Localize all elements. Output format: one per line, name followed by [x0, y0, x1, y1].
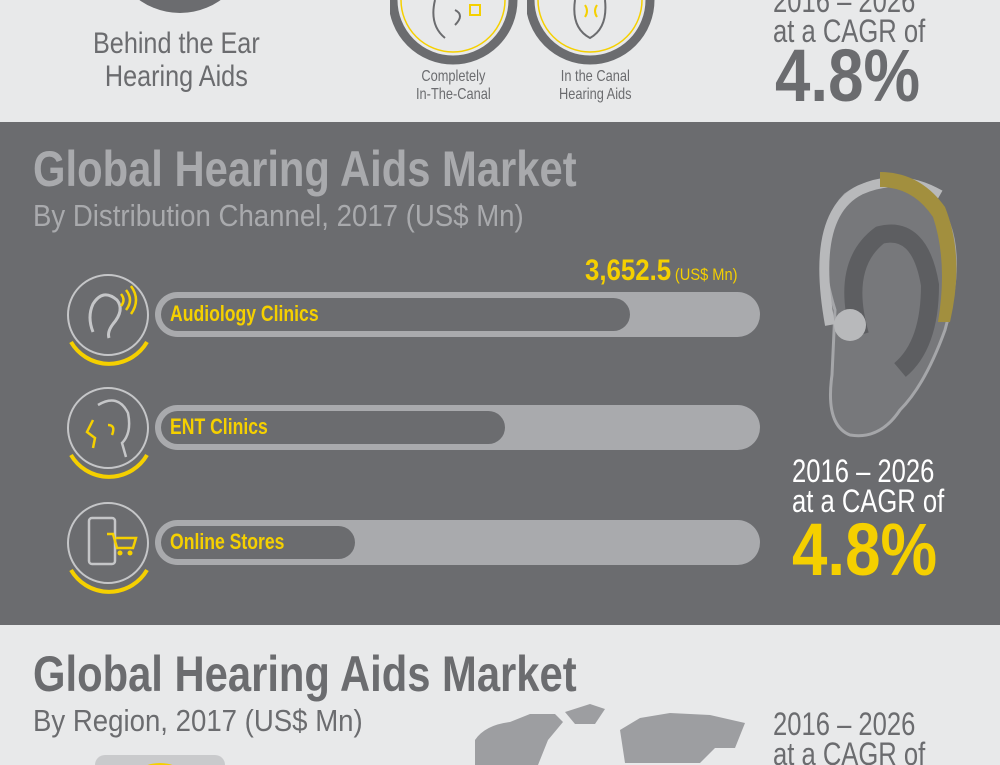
icon: region badge	[95, 755, 225, 765]
callout: CAGR bottom	[773, 706, 926, 765]
text: Completely In-The-Canal: Completely	[421, 68, 485, 85]
text: Behind the Ear Hearing Aids	[93, 27, 260, 93]
subheading: By Region, 2017 (US$ Mn)	[33, 703, 363, 738]
callout: CAGR middle	[792, 453, 944, 519]
icon: behind-the-ear circle fragment	[110, 0, 250, 13]
text: Behind the Ear Hearing Aids: Behind the Ear	[93, 27, 260, 60]
bar: Audiology Clinics	[155, 292, 760, 337]
map	[475, 704, 745, 765]
callout value: 4.8% top: 4.8%	[775, 34, 920, 117]
bar: Online Stores	[155, 520, 760, 565]
text: Completely In-The-Canal	[416, 68, 491, 103]
value label: 3,652.5 (US$ Mn)	[585, 254, 737, 287]
icon: ear	[67, 274, 149, 366]
text: Completely In-The-Canal: In-The-Canal	[416, 86, 491, 103]
bar chart	[67, 274, 760, 594]
bar: Audiology Clinics: Audiology Clinics	[170, 301, 319, 326]
icon: completely in the canal	[390, 0, 518, 64]
heading: Global Hearing Aids Market	[33, 646, 577, 702]
subheading: By Distribution Channel, 2017 (US$ Mn)	[33, 198, 524, 233]
illustration: ear with hearing aid	[819, 172, 957, 438]
icon: head	[67, 387, 149, 479]
icon: phone cart	[67, 502, 149, 594]
panel: distribution channel	[0, 122, 1000, 625]
callout: CAGR top: at a CAGR of	[773, 13, 925, 49]
callout: CAGR middle: 2016 – 2026	[792, 453, 934, 489]
bar: Online Stores: Online Stores	[170, 529, 284, 554]
bottom section: by region	[33, 646, 926, 765]
text: In the Canal Hearing Aids: In the Canal	[561, 68, 630, 85]
callout: CAGR middle: at a CAGR of	[792, 483, 944, 519]
text: Behind the Ear Hearing Aids: Hearing Aids	[105, 60, 248, 93]
icon: in the canal	[527, 0, 654, 64]
heading: Global Hearing Aids Market	[33, 141, 577, 197]
bar: ENT Clinics: ENT Clinics	[170, 414, 268, 439]
text: In the Canal Hearing Aids: Hearing Aids	[559, 86, 632, 103]
bar: ENT Clinics	[155, 405, 760, 450]
callout value: 4.8% middle: 4.8%	[792, 508, 937, 591]
callout: CAGR bottom: 2016 – 2026	[773, 706, 915, 742]
text: In the Canal Hearing Aids	[559, 68, 632, 103]
top section: hearing aid types	[93, 0, 926, 117]
